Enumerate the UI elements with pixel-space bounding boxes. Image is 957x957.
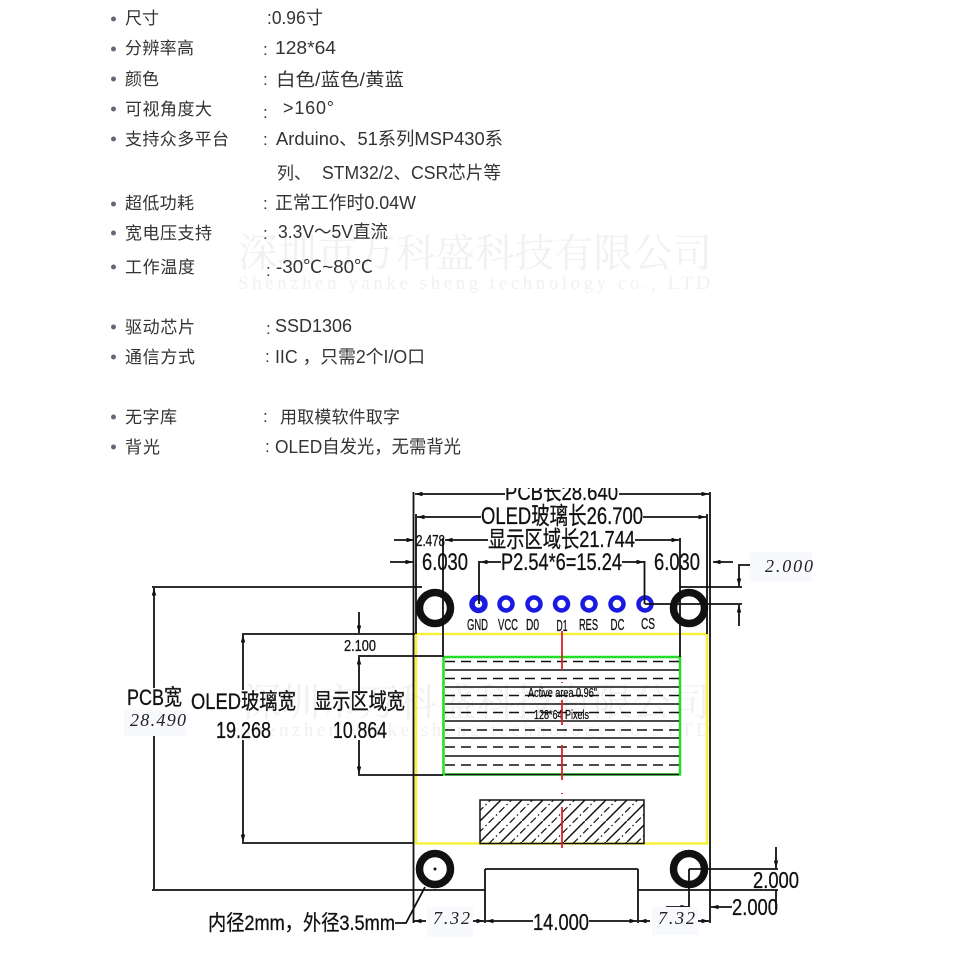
spec: driver chip: 驱动芯片 — [125, 318, 195, 337]
spec: size: 尺寸 — [125, 9, 159, 28]
spec: voltage: 宽电压支持 — [125, 224, 212, 243]
dimension: 2.478 offset: 2.478 — [416, 533, 445, 550]
active display area: 128*64 Pixels — [534, 707, 589, 722]
dimension: 2.000 pin offset: 2.000 — [765, 556, 813, 576]
spec: driver chip — [111, 316, 352, 338]
watermark: lower company name: Shenzhen yanke sheng technology co., LTD — [240, 720, 710, 741]
watermark: lower company name: 深圳市万科盛科技有限公司 — [242, 682, 710, 725]
spec: viewing angle: >160° — [283, 98, 334, 118]
dimension: display width: 10.864 — [333, 717, 387, 743]
spec: interface: : — [265, 347, 270, 366]
spec: backlight: OLED自发光，无需背光 — [275, 437, 461, 457]
dimension: OLED glass width: OLED玻璃宽 — [191, 689, 296, 714]
spec: interface: IIC ，只需2个I/O口 — [275, 347, 425, 367]
spec: colour: : — [263, 70, 268, 89]
note: hole diameters: 内径2mm，外径3.5mm — [208, 912, 395, 935]
dimension: display length: 显示区域长21.744 — [488, 526, 635, 552]
spec: interface — [111, 347, 425, 367]
spec: viewing angle — [111, 98, 334, 122]
spec: voltage: 3.3V～5V直流 — [278, 222, 388, 242]
spec: colour — [111, 70, 404, 90]
spec: backlight: 背光 — [125, 438, 160, 457]
spec: platforms: 列、 — [277, 164, 311, 183]
spec: resolution: 128*64 — [275, 38, 336, 58]
dimension: PCB width — [124, 685, 186, 736]
spec: temperature: 工作温度 — [125, 258, 195, 277]
dimension: OLED glass width — [191, 689, 296, 743]
spec: no font library: 无字库 — [125, 408, 177, 427]
dimension: left 6.030: 6.030 — [422, 549, 468, 576]
spec: platforms: Arduino、51系列MSP430系 — [276, 129, 503, 149]
spec: platforms: 支持众多平台 — [125, 130, 229, 149]
active area caption: Active area 0.96" — [528, 685, 597, 700]
top crop mask over PCB length label — [400, 470, 730, 488]
spec: power: 正常工作时0.04W — [275, 193, 416, 213]
dimension: pin pitch: P2.54*6=15.24 — [501, 549, 622, 576]
dimension: 2.100 glass to display: 2.100 — [344, 638, 376, 655]
spec: colour: 颜色 — [125, 70, 159, 89]
dimension: hole horizontal 2.000: 2.000 — [732, 894, 778, 920]
spec: platforms: STM32/2、CSR芯片等 — [322, 163, 501, 183]
dimension: display width — [314, 689, 405, 743]
spec: voltage: : — [263, 224, 268, 243]
spec: temperature: : — [266, 261, 271, 280]
spec: no font library: 用取模软件取字 — [280, 408, 400, 427]
spec: colour: 白色/蓝色/黄蓝 — [276, 70, 404, 90]
dimension: right 7.32 — [652, 907, 698, 935]
dimension: hole vertical 2.000: 2.000 — [753, 867, 799, 893]
spec: resolution — [111, 38, 336, 59]
leader line to mounting hole — [395, 887, 425, 923]
spec: platforms: : — [263, 130, 268, 149]
spec: size: :0.96寸 — [267, 8, 323, 28]
extension and dimension lines — [152, 492, 778, 923]
dimension: left 7.32: 7.32 — [433, 908, 470, 928]
pin labels: D0 — [526, 617, 539, 634]
spec: power — [111, 193, 416, 213]
spec: driver chip: SSD1306 — [275, 316, 352, 336]
spec: temperature: -30℃~80℃ — [276, 257, 373, 277]
specification list — [111, 8, 503, 457]
spec: temperature — [111, 257, 373, 280]
OLED glass outline — [416, 634, 707, 844]
spec: driver chip: : — [266, 319, 271, 338]
spec: backlight — [111, 437, 461, 457]
red centre line — [561, 631, 563, 848]
spec: power: : — [263, 194, 268, 213]
spec: platforms — [111, 129, 503, 183]
watermark: upper company name: 深圳市万科盛科技有限公司 — [238, 232, 712, 276]
header pins — [472, 598, 652, 610]
pin labels: D1 — [556, 618, 568, 635]
pin labels: RES — [579, 617, 598, 634]
spec: viewing angle: 可视角度大 — [125, 100, 212, 119]
dimension: right 6.030: 6.030 — [654, 549, 700, 576]
dimension: PCB length: PCB长28.640 — [505, 480, 618, 505]
spec: viewing angle: : — [263, 103, 268, 122]
pin labels: VCC — [498, 617, 518, 634]
spec: resolution: : — [263, 40, 268, 59]
ribbon bond hatched area — [480, 800, 644, 844]
spec: interface: 通信方式 — [125, 348, 195, 367]
mechanical drawing — [124, 480, 813, 937]
spec: backlight: : — [265, 437, 270, 456]
dimension: display width: 显示区域宽 — [314, 689, 405, 714]
pin labels — [467, 616, 655, 635]
watermark: upper company name: Shenzhen yanke sheng technology co., LTD — [238, 273, 710, 294]
spec: voltage — [111, 222, 388, 243]
dimension: left 7.32 — [427, 907, 473, 937]
pin labels: CS — [641, 616, 655, 633]
dimension: 2.000 pin offset — [750, 552, 813, 582]
dimension: right 7.32: 7.32 — [658, 908, 695, 928]
pin labels: GND — [467, 617, 488, 634]
dimension: connector 14.000: 14.000 — [533, 909, 589, 935]
dimension: PCB width: PCB宽 — [127, 685, 182, 710]
dimension: PCB width: 28.490 — [130, 710, 186, 730]
spec: resolution: 分辨率高 — [125, 39, 194, 58]
spec: size — [111, 8, 323, 28]
active display area — [444, 657, 680, 774]
spec: power: 超低功耗 — [125, 194, 194, 213]
pin labels: DC — [610, 617, 624, 634]
dimension: OLED glass width: 19.268 — [216, 717, 271, 743]
dimension: OLED glass length: OLED玻璃长26.700 — [481, 503, 643, 530]
spec: no font library: : — [263, 407, 268, 426]
spec: no font library — [111, 407, 400, 427]
mounting holes — [420, 592, 704, 884]
